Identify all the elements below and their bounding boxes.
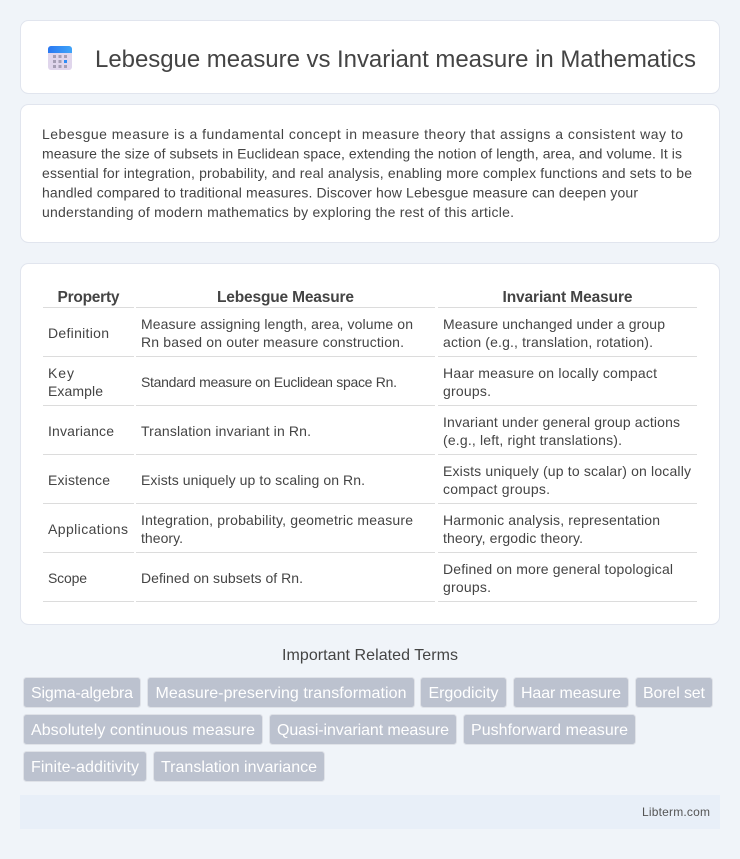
row: Key Example: [43, 365, 697, 406]
row: Definition: Definition: [48, 325, 109, 341]
row: Key Example: groups.: [443, 383, 491, 399]
table header: Lebesgue Measure: [217, 289, 354, 306]
tag: Translation invariance: [154, 752, 324, 782]
panel: introduction: [20, 104, 720, 242]
row: Definition: action (e.g., translation, rotation).: [443, 334, 653, 350]
text block: introduction: Lebesgue measure is a fundamental concept in measure theory that assigns a consistent way to: [42, 126, 683, 142]
row: Invariance: Invariance: [48, 423, 114, 439]
row: Applications: Applications: [48, 521, 128, 537]
row: Existence: Exists uniquely up to scaling on Rn.: [141, 472, 365, 488]
icon: calendar: [48, 46, 72, 70]
tag: Finite-additivity: [24, 752, 146, 782]
row: Key Example: Haar measure on locally compact: [443, 365, 657, 381]
row: Existence: compact groups.: [443, 481, 550, 497]
row: Applications: [43, 512, 697, 552]
row: Scope: groups.: [443, 579, 491, 595]
text block: introduction: understanding of modern mathematics by exploring the rest of this article.: [42, 204, 514, 220]
footer credit: Libterm.com: [642, 805, 710, 819]
tag: Translation invariance: Translation invariance: [161, 759, 317, 776]
text block: introduction: essential for integration, probability, and real analysis, enabling more complex functions and sets to be: [42, 165, 692, 181]
heading: related terms: Important Related Terms: [282, 647, 458, 664]
tag: Borel set: [636, 678, 712, 708]
row: Definition: Measure assigning length, area, volume on: [141, 316, 413, 332]
tag: Absolutely continuous measure: Absolutely continuous measure: [31, 722, 255, 739]
row: Existence: [43, 463, 697, 504]
tag: Quasi-invariant measure: Quasi-invariant measure: [277, 722, 449, 739]
row: Scope: Defined on subsets of Rn.: [141, 570, 303, 586]
panel: header: [20, 20, 720, 94]
row: Invariance: Invariant under general group actions: [443, 414, 680, 430]
tag: Absolutely continuous measure: [24, 714, 262, 744]
tag: Measure-preserving transformation: [148, 678, 414, 708]
tag: Pushforward measure: Pushforward measure: [471, 722, 628, 739]
title: Lebesgue measure vs Invariant measure in Mathematics: [95, 46, 696, 73]
row: Applications: Harmonic analysis, representation: [443, 512, 660, 528]
row: Applications: Integration, probability, geometric measure: [141, 512, 413, 528]
row: Key Example: Standard measure on Euclidean space Rn.: [141, 374, 397, 390]
row: Scope: Scope: [48, 570, 87, 586]
tag: Sigma-algebra: [24, 678, 140, 708]
row: Invariance: [43, 414, 697, 454]
table header: Invariant Measure: [502, 289, 633, 306]
text block: introduction: [42, 126, 692, 220]
tag: Haar measure: Haar measure: [521, 685, 621, 702]
row: Definition: Measure unchanged under a group: [443, 316, 665, 332]
tag: Quasi-invariant measure: [270, 714, 456, 744]
row: Invariance: Translation invariant in Rn.: [141, 423, 311, 439]
row: Existence: Existence: [48, 472, 110, 488]
text block: introduction: measure the size of subsets in Euclidean space, extending the notion of length, area, and volume. It is: [42, 146, 682, 162]
table header: Property: [58, 289, 120, 306]
tag: Borel set: Borel set: [643, 685, 706, 702]
row: Definition: Rn based on outer measure construction.: [141, 334, 404, 350]
row: Applications: theory, ergodic theory.: [443, 530, 583, 546]
row: Existence: Exists uniquely (up to scalar) on locally: [443, 463, 691, 479]
row: Applications: theory.: [141, 530, 183, 546]
row: Scope: Defined on more general topological: [443, 561, 673, 577]
footer bar: [20, 795, 720, 829]
related term tags: [24, 678, 712, 782]
row: Key Example: Example: [48, 383, 103, 399]
tag: Sigma-algebra: Sigma-algebra: [31, 685, 133, 702]
panel: comparison table: [20, 264, 720, 624]
text block: introduction: handled compared to traditional measures. Discover how Lebesgue measure can deepen your: [42, 184, 638, 200]
table header: [43, 289, 697, 308]
tag: Ergodicity: [420, 678, 506, 708]
tag: Pushforward measure: [464, 714, 636, 744]
tag: Ergodicity: Ergodicity: [428, 685, 498, 702]
row: Key Example: Key: [48, 365, 74, 381]
tag: Measure-preserving transformation: Measure-preserving transformation: [156, 685, 406, 702]
tag: Finite-additivity: Finite-additivity: [31, 759, 139, 776]
tag: Haar measure: [514, 678, 628, 708]
row: Invariance: (e.g., left, right translations).: [443, 432, 622, 448]
row: Definition: [43, 316, 697, 356]
row: Scope: [43, 561, 697, 602]
